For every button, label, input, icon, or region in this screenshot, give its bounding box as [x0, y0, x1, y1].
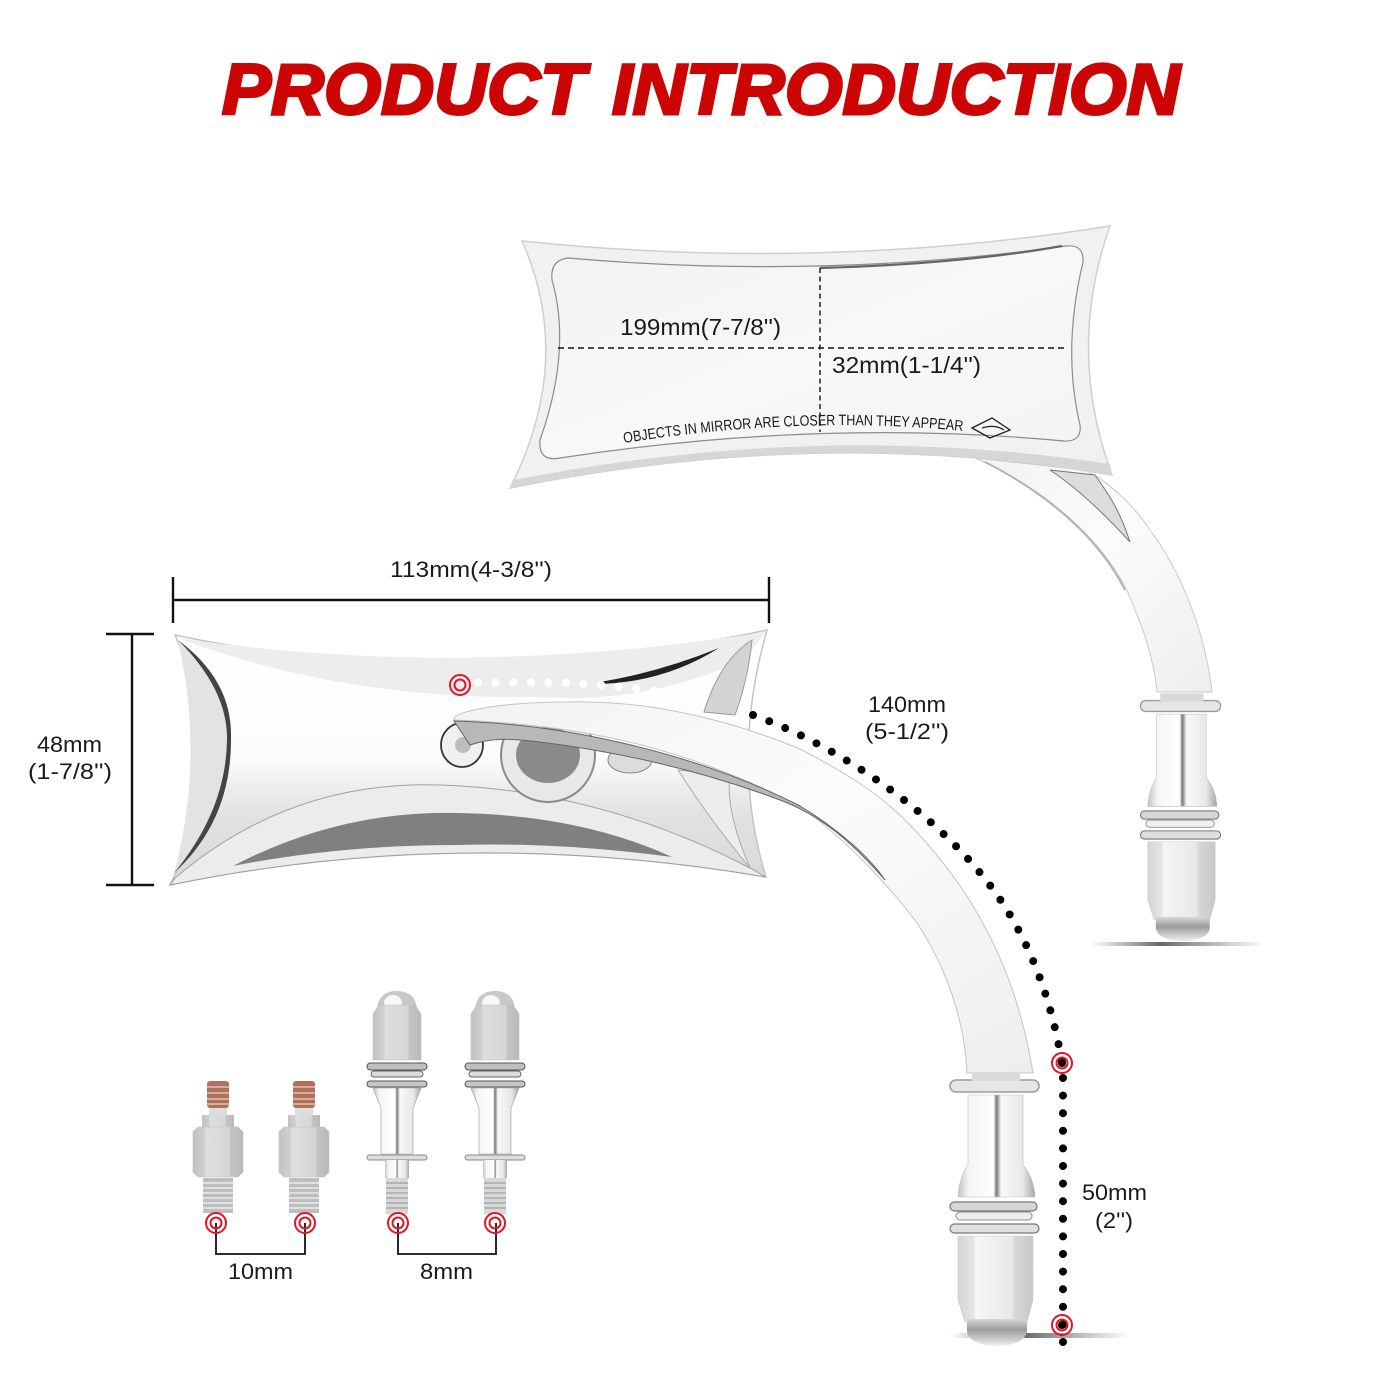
icon: upper mirror arm: [975, 458, 1212, 692]
target: 10mm left: [206, 1213, 226, 1233]
icon: side bolt: [608, 747, 652, 773]
black dotted line 50mm: [1059, 1078, 1067, 1345]
black dotted arc 140mm: [753, 715, 1062, 1063]
icon: 10mm bolt left: [193, 1081, 243, 1213]
icon: mounting bolts 10mm: [193, 1081, 329, 1213]
8mm label: 8mm: [420, 1259, 473, 1284]
113mm label: 113mm(4-3/8''): [390, 557, 552, 582]
icon: centre socket: [501, 708, 595, 802]
icon: lower mirror body: [170, 630, 767, 885]
10mm bracket and label: [206, 1213, 315, 1284]
icon: diamond logo: [972, 418, 1010, 438]
icon: upper ground shadow: [1090, 942, 1265, 946]
target: 8mm right: [485, 1213, 505, 1233]
140mm label: (5-1/2''): [865, 719, 949, 744]
icon: upper mirror rim shade: [510, 445, 1112, 488]
icon: right edge facet: [678, 770, 750, 868]
icon: dark recess: [233, 813, 672, 866]
target: 10mm right: [295, 1213, 315, 1233]
50mm label: [1082, 1180, 1147, 1233]
140mm label: 140mm: [868, 692, 946, 717]
icon: small bolt: [441, 723, 483, 767]
icon: arm inner chrome strip: [454, 721, 885, 880]
icon: upper mirror housing: [510, 226, 1112, 488]
measure targets: [450, 675, 1072, 1335]
10mm label: 10mm: [228, 1259, 293, 1284]
icon: top band: [178, 632, 765, 698]
icon: upper mirror highlight: [820, 246, 1062, 268]
icon: 8mm bolt left: [367, 991, 427, 1214]
8mm bracket and label: [388, 1213, 505, 1284]
target: shaft end: [1052, 1315, 1072, 1335]
title: INTRODUCTION: [612, 51, 1182, 130]
icon: lower mount stack: [950, 1072, 1039, 1346]
icon: left edge reflection: [174, 640, 231, 873]
icon: upper arm edge: [985, 462, 1125, 590]
icon: mounting bolts 8mm: [367, 991, 525, 1214]
target: mirror arc start: [450, 675, 470, 695]
title: [222, 51, 1182, 130]
height dashed line: [819, 268, 821, 432]
48mm height dimension: [28, 634, 154, 885]
warning text: OBJECTS IN MIRROR ARE CLOSER THAN THEY APPEAR: [624, 414, 963, 442]
mirror: upper glass face: [508, 225, 1113, 489]
140mm label: [865, 692, 949, 744]
width dashed line: [558, 347, 1068, 349]
icon: left wedge shading: [174, 640, 231, 873]
icon: small bolt head: [455, 737, 471, 753]
icon: lower mirror arm: [454, 702, 1033, 1073]
mirror width label: 199mm(7-7/8''): [620, 314, 781, 340]
48mm label: 48mm: [37, 732, 102, 757]
48mm inch label: (1-7/8''): [28, 759, 112, 784]
icon: upper arm recess: [1050, 470, 1130, 542]
mirror: back-view arm and mount: [975, 458, 1265, 946]
icon: lower ground shadow: [950, 1333, 1130, 1338]
mirror height label: 32mm(1-1/4''): [832, 352, 981, 378]
icon: 10mm bolt right: [279, 1081, 329, 1213]
50mm label: 50mm: [1082, 1180, 1147, 1205]
icon: upper mirror glass: [540, 246, 1083, 459]
icon: lower ridge: [170, 785, 766, 885]
50mm label: (2''): [1095, 1208, 1133, 1233]
113mm width dimension: [173, 557, 769, 623]
icon: mount bolts on mirror back: [441, 708, 652, 802]
target: arc end: [1052, 1053, 1072, 1073]
icon: inner socket: [516, 727, 580, 783]
white dotted path on mirror: [478, 682, 692, 697]
icon: top right reflection: [600, 648, 719, 684]
icon: 8mm bolt right: [465, 991, 525, 1214]
target: 8mm left: [388, 1213, 408, 1233]
title: PRODUCT: [222, 51, 591, 130]
mirror: front view: [170, 630, 767, 885]
icon: upper mount stack: [1140, 693, 1221, 941]
icon: top right corner facet: [704, 640, 752, 715]
